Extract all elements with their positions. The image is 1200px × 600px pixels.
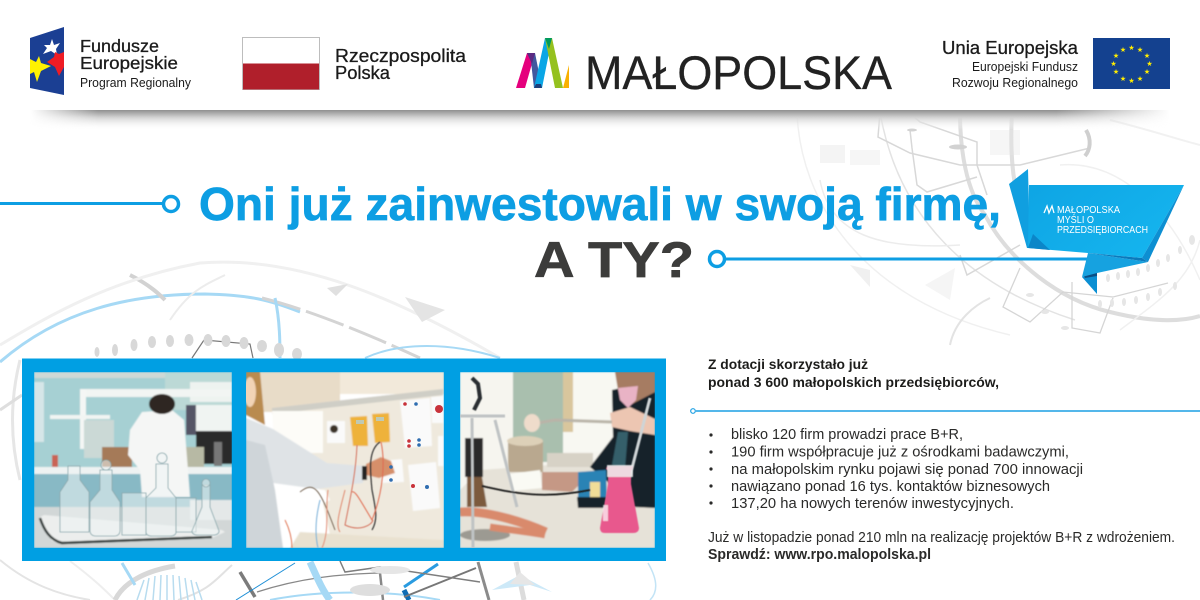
divider with ring [691,409,1200,413]
logo: Małopolska [516,38,893,99]
text block: call to action [708,530,1175,563]
logo: Unia Europejska: Unia Europejska [942,38,1079,58]
logo: Fundusze Europejskie [30,27,191,95]
logo: Unia Europejska: ★ [1128,44,1135,52]
header band [0,0,1200,110]
logo: Unia Europejska: ★ [1144,52,1150,60]
logo: Unia Europejska: ★ [1113,68,1119,76]
background: top-right gear pattern [797,112,1200,345]
bullet list: 137,20 ha nowych terenów inwestycyjnych. [731,496,1014,512]
logo: Fundusze Europejskie: Europejskie [80,53,178,73]
subtitle: A TY?: A TY? [534,232,694,288]
ribbon text: MAŁOPOLSKA [1057,204,1120,216]
logo: Unia Europejska: ★ [1137,75,1143,83]
bullet list: na małopolskim rynku pojawi się ponad 700 innowacji [731,462,1083,478]
bullet list: nawiązano ponad 16 tys. kontaktów biznesowych [731,479,1050,495]
logo: Fundusze Europejskie: Program Regionalny [80,75,191,90]
text block: intro: ponad 3 600 małopolskich przedsiębiorców, [708,375,999,390]
logo: Unia Europejska: ★ [1146,60,1153,68]
logo: Unia Europejska: Rozwoju Regionalnego [952,75,1078,90]
title: Oni już zainwestowali w swoją firmę, [199,178,1001,230]
logo: Unia Europejska: ★ [1128,77,1135,85]
text block: intro [708,357,999,390]
background: bottom-left sunburst and shapes [94,284,552,600]
ribbon text: PRZEDSIĘBIORCACH [1057,224,1148,236]
photo: laboratory glassware [34,372,232,548]
logo: Fundusze Europejskie: Fundusze [80,36,159,56]
bullet list: blisko 120 firm prowadzi prace B+R, [731,427,963,443]
logo: Unia Europejska: ★ [1110,60,1117,68]
ribbon badge [1009,169,1184,294]
logo: Unia Europejska: ★ [1144,68,1150,76]
background: bottom-left gear pattern [0,262,656,600]
bullet list [709,427,1083,512]
logo: Unia Europejska: ★ [1137,46,1143,54]
connector line right with ring [710,252,1088,266]
logo: Unia Europejska: ★ [1120,46,1126,54]
logo: Rzeczpospolita Polska [242,38,467,90]
photo: electronics workbench [244,372,444,548]
logo: Unia Europejska [942,38,1170,90]
text block: intro: Z dotacji skorzystało już [708,357,868,372]
text block: call to action: Już w listopadzie ponad 210 mln na realizację projektów B+R z wdrożeniem. [708,530,1175,546]
header shadow [36,110,1161,124]
logo: Unia Europejska: ★ [1120,75,1126,83]
ribbon text [1044,204,1148,236]
logo: Unia Europejska: Europejski Fundusz [972,59,1078,74]
logo: Rzeczpospolita Polska: Polska [335,62,391,83]
ribbon text: MYŚLI O [1057,213,1094,226]
logo: Małopolska: MAŁOPOLSKA [585,46,893,99]
photo strip frame [22,358,666,561]
background: top-right dots ring [820,128,1195,330]
logo: Unia Europejska: ★ [1113,52,1119,60]
bullet list: 190 firm współpracuje już z ośrodkami badawczymi, [731,444,1069,460]
logo: Rzeczpospolita Polska: Rzeczpospolita [335,45,467,66]
photo: chemistry bench [460,372,655,548]
text block: call to action: Sprawdź: www.rpo.malopolska.pl [708,547,931,563]
connector line left with ring [0,196,178,212]
